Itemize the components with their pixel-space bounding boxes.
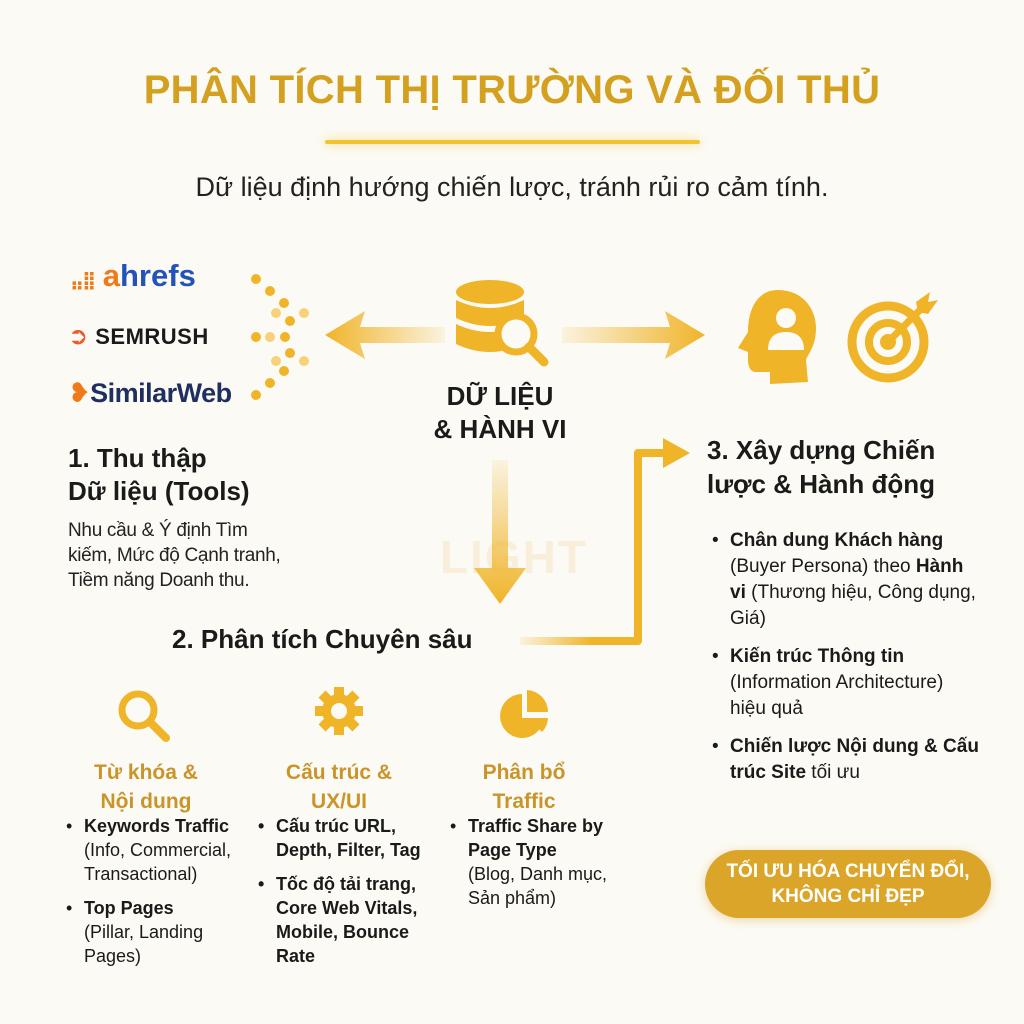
section 1 heading bbox=[68, 443, 250, 506]
section 3 bullets: Kiến trúc Thông tin (Information Architecture) hiệu quả bbox=[730, 646, 943, 719]
heading: UX/UI bbox=[311, 790, 367, 813]
section 3 heading: 3. Xây dựng Chiến bbox=[707, 435, 935, 465]
center label: & HÀNH VI bbox=[434, 414, 566, 444]
section 1 text: Tiềm năng Doanh thu. bbox=[68, 570, 249, 591]
bullets: Top Pages bbox=[84, 898, 174, 918]
logo: similarweb: ❥SimilarWeb bbox=[68, 378, 232, 408]
heading bbox=[94, 761, 198, 813]
column: traffic bbox=[450, 690, 607, 908]
column: structure bbox=[258, 687, 421, 966]
section 3 bullets: Chiến lược Nội dung & Cấu trúc Site tối ưu bbox=[730, 736, 979, 783]
bullets: (Pillar, Landing Pages) bbox=[84, 922, 203, 966]
icon: database search bbox=[456, 280, 548, 366]
section 3 heading: lược & Hành động bbox=[707, 469, 935, 499]
icon: head persona bbox=[738, 290, 816, 384]
icon: pie chart bbox=[500, 690, 548, 738]
bullets: Tốc độ tải trang, Core Web Vitals, Mobile, Bounce Rate bbox=[276, 874, 417, 966]
icon: target bbox=[848, 292, 938, 382]
arrow: left to tools bbox=[325, 311, 445, 359]
icon: magnifier bbox=[118, 690, 170, 742]
center label: DỮ LIỆU bbox=[447, 381, 553, 411]
arrow: down bbox=[474, 460, 526, 604]
bullets: (Info, Commercial, Transactional) bbox=[84, 840, 231, 884]
section 3 bullets: Chân dung Khách hàng (Buyer Persona) theo Hành vi (Thương hiệu, Công dụng, Giá) bbox=[730, 530, 976, 629]
heading: Traffic bbox=[492, 790, 556, 813]
section 1 text bbox=[68, 519, 280, 591]
center label bbox=[434, 381, 566, 444]
section 2 heading: 2. Phân tích Chuyên sâu bbox=[172, 624, 473, 654]
arrow: connector to section 3 bbox=[520, 438, 690, 645]
section 3 bullets bbox=[712, 530, 979, 783]
section 1 heading: Dữ liệu (Tools) bbox=[68, 476, 250, 506]
bullets: Keywords Traffic bbox=[84, 816, 229, 836]
heading bbox=[286, 761, 392, 813]
column: keywords bbox=[66, 690, 231, 966]
logo: semrush: ➲ SEMRUSH bbox=[68, 323, 209, 350]
bullets bbox=[66, 816, 231, 966]
bullets bbox=[450, 816, 607, 908]
arrow: right to strategy bbox=[562, 311, 705, 359]
heading bbox=[483, 761, 565, 813]
bullets: (Blog, Danh mục, Sản phẩm) bbox=[468, 864, 607, 908]
section 1 text: Nhu cầu & Ý định Tìm bbox=[68, 520, 248, 541]
watermark: LIGHT bbox=[440, 531, 588, 583]
callout button: KHÔNG CHỈ ĐẸP bbox=[771, 886, 925, 907]
logo: ahrefs: ⣤⣿ ahrefs bbox=[70, 258, 196, 293]
section 3 heading bbox=[707, 435, 935, 499]
subtitle: Dữ liệu định hướng chiến lược, tránh rủi ro cảm tính. bbox=[196, 172, 828, 202]
section 1 text: kiếm, Mức độ Cạnh tranh, bbox=[68, 545, 280, 566]
title underline bbox=[325, 140, 700, 144]
bullets bbox=[258, 816, 421, 966]
heading: Từ khóa & bbox=[94, 761, 198, 784]
callout button: TỐI ƯU HÓA CHUYỂN ĐỔI, bbox=[726, 861, 970, 882]
heading: Nội dung bbox=[100, 790, 191, 813]
bullets: Cấu trúc URL, Depth, Filter, Tag bbox=[276, 816, 421, 860]
heading: Cấu trúc & bbox=[286, 761, 392, 784]
section 1 heading: 1. Thu thập bbox=[68, 443, 207, 473]
bullets: Traffic Share by Page Type bbox=[468, 816, 603, 860]
callout button bbox=[705, 850, 991, 918]
logos: tools bbox=[68, 258, 232, 408]
icon: gear bbox=[315, 687, 363, 735]
dots funnel bbox=[251, 274, 309, 400]
title: PHÂN TÍCH THỊ TRƯỜNG VÀ ĐỐI THỦ bbox=[144, 68, 880, 112]
heading: Phân bổ bbox=[483, 761, 565, 784]
